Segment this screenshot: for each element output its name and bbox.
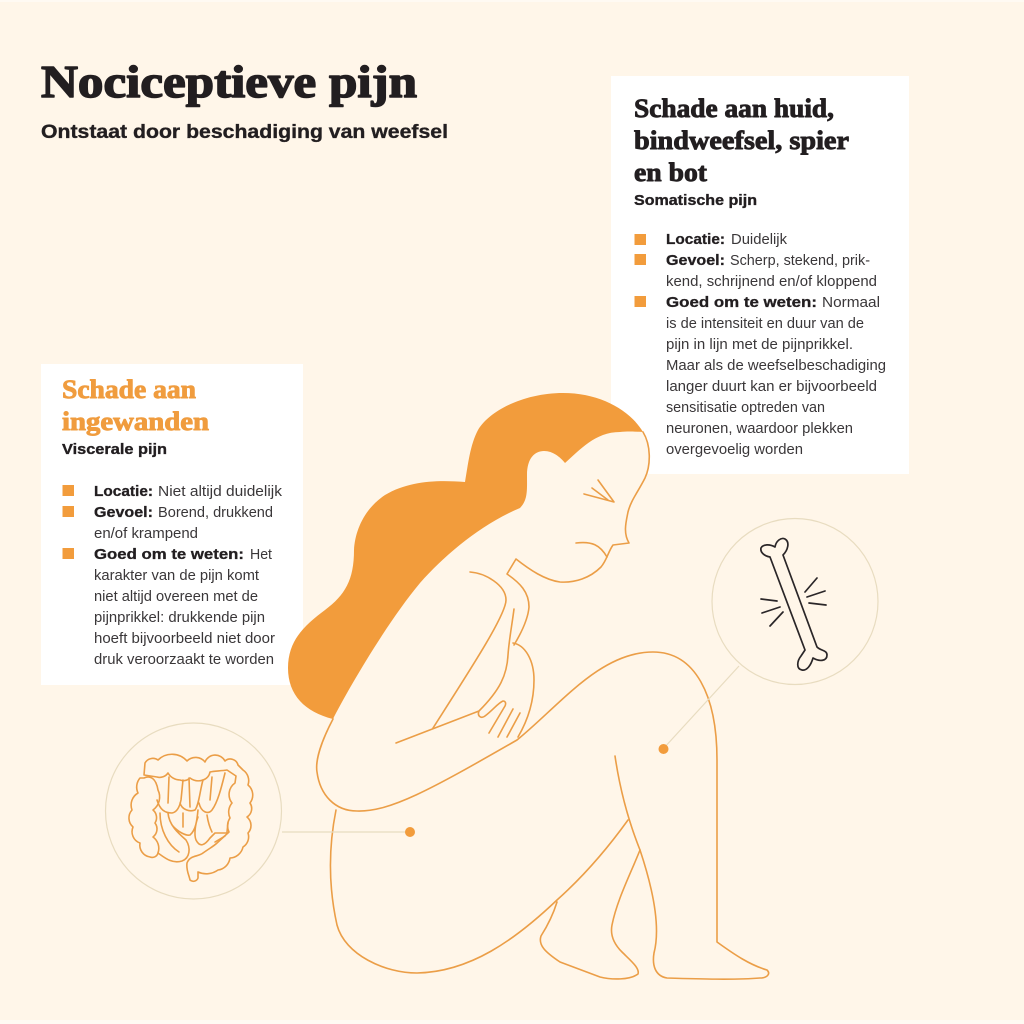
arm, knee and front leg	[317, 652, 769, 979]
bullet list: visceral: karakter van de pijn komt	[94, 568, 259, 584]
bullet list: somatic	[634, 232, 886, 458]
bullet list: visceral: en/of krampend	[94, 526, 198, 542]
bullet list: somatic: is de intensiteit en duur van de	[666, 316, 864, 332]
connector line	[282, 831, 410, 833]
heading: somatic: Schade aan huid,	[634, 94, 834, 123]
bullet list: visceral: Het	[250, 547, 272, 563]
bullet list: somatic: Normaal	[822, 295, 880, 311]
face outline	[507, 432, 649, 645]
dot	[658, 744, 668, 754]
panel: somatic pain	[611, 76, 909, 474]
bullet list: visceral: Niet altijd duidelijk	[158, 484, 283, 500]
bullet list: somatic: neuronen, waardoor plekken	[666, 421, 853, 437]
heading: visceral: ingewanden	[62, 407, 210, 436]
bullet list: somatic: kend, schrijnend en/of kloppend	[666, 274, 877, 290]
closed eye	[584, 480, 614, 502]
subheading: somatic: Somatische pijn	[634, 193, 757, 209]
bullet list: somatic: overgevoelig worden	[666, 442, 803, 458]
title: Nociceptieve pijn	[41, 56, 417, 107]
bullet list: somatic: Maar als de weefselbeschadiging	[666, 358, 886, 374]
subheading: visceral: Viscerale pijn	[62, 442, 167, 458]
bullet list: somatic: Scherp, stekend, prik-	[730, 253, 870, 269]
hair	[288, 393, 643, 719]
bullet list: somatic: pijn in lijn met de pijnprikkel.	[666, 337, 853, 353]
icon: bone with pain marks	[761, 538, 827, 670]
rear foot	[540, 850, 640, 979]
bullet list: visceral: pijnprikkel: drukkende pijn	[94, 610, 265, 626]
bullet list: visceral	[62, 484, 283, 668]
figure: seated woman	[288, 393, 769, 979]
panel: visceral pain	[41, 364, 303, 685]
subtitle: Ontstaat door beschadiging van weefsel	[41, 122, 448, 143]
callout: intestines	[106, 723, 415, 899]
bullet list: visceral: Gevoel:	[94, 505, 153, 521]
bullet list: visceral: hoeft bijvoorbeeld niet door	[94, 631, 275, 647]
heading: somatic	[634, 94, 849, 187]
bullet list: somatic: sensitisatie optreden van	[666, 400, 825, 416]
upper arm	[433, 572, 506, 728]
circle	[712, 518, 878, 684]
dot	[405, 827, 415, 837]
heading: somatic: bindweefsel, spier	[634, 126, 849, 155]
bullet list: visceral: Goed om te weten:	[94, 547, 244, 563]
bullet list: visceral: druk veroorzaakt te worden	[94, 652, 274, 668]
icon: intestines	[129, 754, 253, 881]
bullet list: somatic: Locatie:	[666, 232, 725, 248]
bullet list: somatic: Duidelijk	[731, 232, 788, 248]
circle	[106, 723, 282, 899]
callout: bone	[658, 518, 878, 754]
torso and thigh	[330, 810, 628, 973]
bullet list: somatic: langer duurt kan er bijvoorbeeld	[666, 379, 877, 395]
frown	[576, 543, 607, 557]
bullet list: visceral: Borend, drukkend	[158, 505, 273, 521]
forearm and hand	[396, 609, 520, 743]
heading: visceral: Schade aan	[62, 375, 197, 404]
chest	[513, 643, 534, 737]
bullet list: somatic: Goed om te weten:	[666, 295, 817, 311]
bullet list: visceral: Locatie:	[94, 484, 153, 500]
connector line	[663, 666, 739, 749]
face fill	[440, 430, 649, 600]
bullet list: visceral: niet altijd overeen met de	[94, 589, 258, 605]
heading: visceral	[62, 375, 210, 436]
heading: somatic: en bot	[634, 158, 707, 187]
bullet list: somatic: Gevoel:	[666, 253, 725, 269]
